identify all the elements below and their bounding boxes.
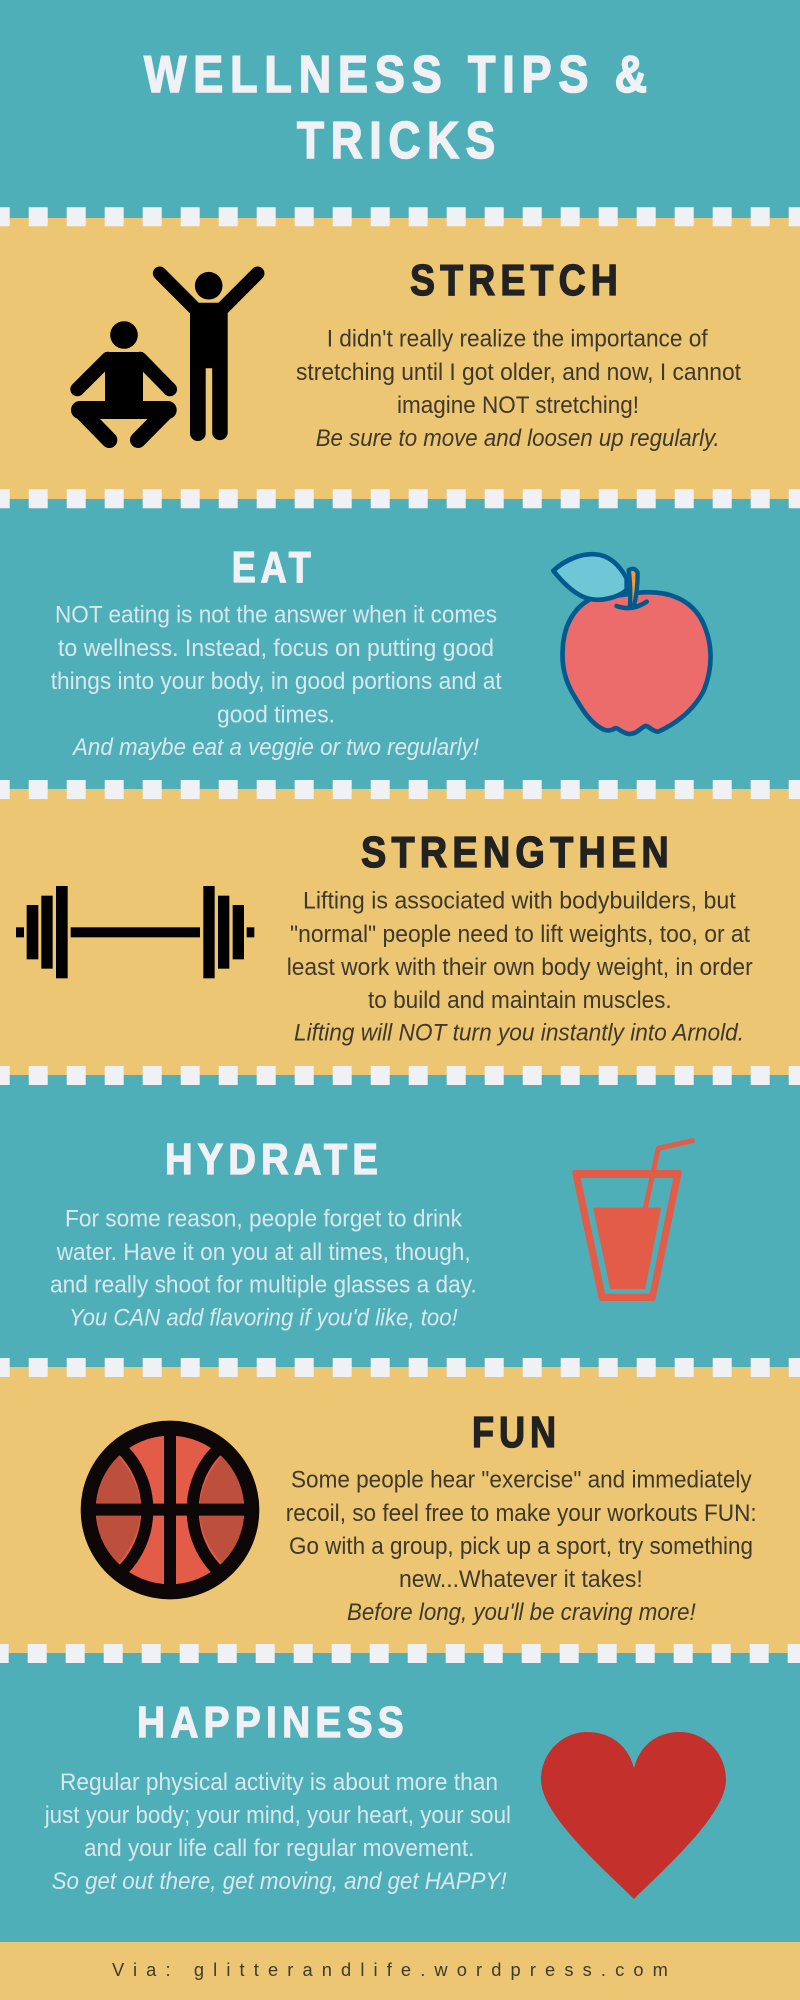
hydrate text: and really shoot for multiple glasses a day. <box>50 1272 477 1299</box>
strengthen text: Lifting is associated with bodybuilders, but <box>303 888 736 915</box>
hydrate text: For some reason, people forget to drink <box>65 1206 463 1233</box>
happiness text: So get out there, get moving, and get HAPPY! <box>52 1868 507 1895</box>
icon: apple <box>553 554 711 734</box>
icon: stretching figures <box>77 272 258 441</box>
hydrate text <box>50 1206 477 1332</box>
hydrate text: You CAN add flavoring if you'd like, too! <box>69 1305 458 1332</box>
strengthen text: Lifting will NOT turn you instantly into Arnold. <box>294 1020 744 1047</box>
icon: drink glass <box>572 1141 692 1301</box>
happiness text: and your life call for regular movement. <box>84 1835 474 1862</box>
icon: basketball <box>81 1421 259 1599</box>
panel: stretch background <box>0 218 800 499</box>
happiness text: just your body; your mind, your heart, your soul <box>44 1802 511 1829</box>
strengthen heading: STRENGTHEN <box>361 828 674 877</box>
happiness text <box>44 1769 511 1895</box>
stretch heading: STRETCH <box>410 256 623 305</box>
hydrate text: water. Have it on you at all times, though, <box>56 1239 471 1266</box>
eat text: NOT eating is not the answer when it comes <box>55 602 497 629</box>
icon: heart <box>541 1732 726 1899</box>
footer source text: Via: glitterandlife.wordpress.com <box>112 1960 677 1980</box>
title: WELLNESS TIPS & <box>144 46 654 104</box>
fun heading: FUN <box>472 1408 561 1457</box>
fun text: Before long, you'll be craving more! <box>347 1599 696 1626</box>
fun text: Some people hear "exercise" and immediately <box>291 1467 752 1494</box>
eat text: things into your body, in good portions and at <box>51 668 502 695</box>
strengthen text <box>287 888 753 1047</box>
stretch text: Be sure to move and loosen up regularly. <box>316 425 720 452</box>
stretch text: stretching until I got older, and now, I cannot <box>296 359 741 386</box>
icon: barbell <box>16 886 254 978</box>
title: TRICKS <box>297 112 502 170</box>
stretch text: imagine NOT stretching! <box>397 392 639 419</box>
stretch text <box>296 326 741 452</box>
happiness heading: HAPPINESS <box>137 1698 409 1747</box>
eat text <box>51 602 502 761</box>
strengthen text: least work with their own body weight, in order <box>287 954 753 981</box>
panel: footer background <box>0 1942 800 2000</box>
hydrate heading: HYDRATE <box>165 1135 383 1184</box>
panel: strengthen background <box>0 789 800 1075</box>
happiness text: Regular physical activity is about more than <box>60 1769 498 1796</box>
stretch text: I didn't really realize the importance of <box>327 326 708 353</box>
strengthen text: "normal" people need to lift weights, too, or at <box>290 921 750 948</box>
eat heading: EAT <box>232 543 316 592</box>
panel: fun background <box>0 1367 800 1653</box>
fun text: new...Whatever it takes! <box>399 1566 643 1593</box>
fun text: Go with a group, pick up a sport, try something <box>289 1533 753 1560</box>
fun text <box>286 1467 757 1626</box>
eat text: And maybe eat a veggie or two regularly! <box>71 734 479 761</box>
eat text: to wellness. Instead, focus on putting good <box>58 635 494 662</box>
title <box>144 46 654 170</box>
strengthen text: to build and maintain muscles. <box>368 987 672 1014</box>
fun text: recoil, so feel free to make your workouts FUN: <box>286 1500 757 1527</box>
eat text: good times. <box>217 702 335 729</box>
